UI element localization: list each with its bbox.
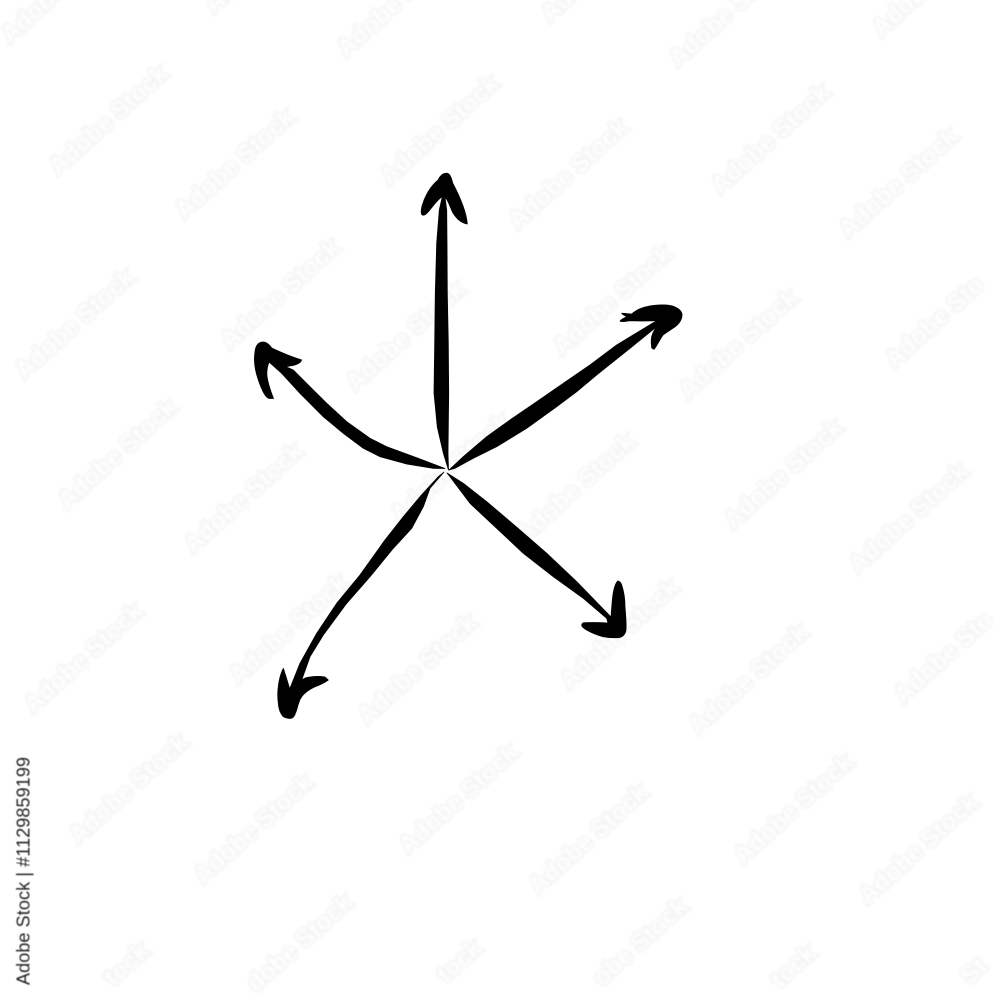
watermark pattern: Adobe Stock xyxy=(375,70,505,190)
stock image id label: Adobe Stock | #1129859199 xyxy=(14,757,34,985)
arrow: lower right xyxy=(447,473,626,638)
watermark pattern: Adobe Stock xyxy=(548,240,678,360)
watermark pattern: Adobe Stock xyxy=(524,779,654,899)
watermark pattern: Adobe Stock xyxy=(216,234,346,354)
watermark pattern: tock xyxy=(766,939,822,993)
watermark pattern: tock xyxy=(99,937,155,991)
watermark pattern: Adobe Stock xyxy=(504,114,634,234)
watermark pattern: Adobe Stock xyxy=(341,276,471,396)
watermark pattern: dobe Stock xyxy=(242,889,358,997)
watermark pattern: Adobe Stock xyxy=(394,739,524,859)
watermark pattern: Adobe Stock xyxy=(64,729,194,849)
arrow: upper right xyxy=(449,305,682,470)
watermark pattern: Adobe Stock xyxy=(44,60,174,180)
watermark pattern: Adobe Stock xyxy=(555,574,685,694)
watermark pattern: Adobe Stock xyxy=(844,458,974,578)
watermark pattern: Adobe Stock xyxy=(386,408,516,528)
watermark pattern: Adobe Stock xyxy=(834,123,964,243)
watermark pattern: Adobe Stock xyxy=(19,598,149,718)
watermark pattern: Adobe Sto xyxy=(880,271,989,373)
watermark pattern: Adobe Stock xyxy=(224,569,354,689)
watermark pattern: Adobe Stock xyxy=(729,749,859,869)
arrow: upper left xyxy=(254,342,445,468)
watermark pattern: St xyxy=(956,953,992,989)
watermark pattern: Adobe Stock xyxy=(511,428,641,548)
watermark pattern: Adobe Stock xyxy=(170,104,300,224)
watermark pattern: Adobe Stock xyxy=(10,264,140,384)
watermark pattern: tock xyxy=(432,934,488,988)
watermark pattern: Adobe Stock xyxy=(179,438,309,558)
arrow: up xyxy=(421,173,467,470)
watermark pattern: Adobe Stock xyxy=(353,609,483,729)
watermark pattern: Adobe Stock xyxy=(684,619,814,739)
watermark pattern: Adobe Stock xyxy=(854,789,984,909)
watermark pattern: Adobe Sto xyxy=(889,606,998,708)
watermark pattern: Adobe Stock xyxy=(189,769,319,889)
watermark pattern: obe Stock xyxy=(588,893,693,991)
watermark pattern: Adobe Stock xyxy=(674,284,804,404)
watermark pattern: Adobe Stock xyxy=(53,394,183,514)
watermark pattern: Adobe Stock xyxy=(706,79,836,199)
arrow: lower left xyxy=(278,472,444,719)
arrow group: five arrows radiating from a centre xyxy=(254,173,682,719)
watermark pattern: Adobe Stock xyxy=(719,414,849,534)
